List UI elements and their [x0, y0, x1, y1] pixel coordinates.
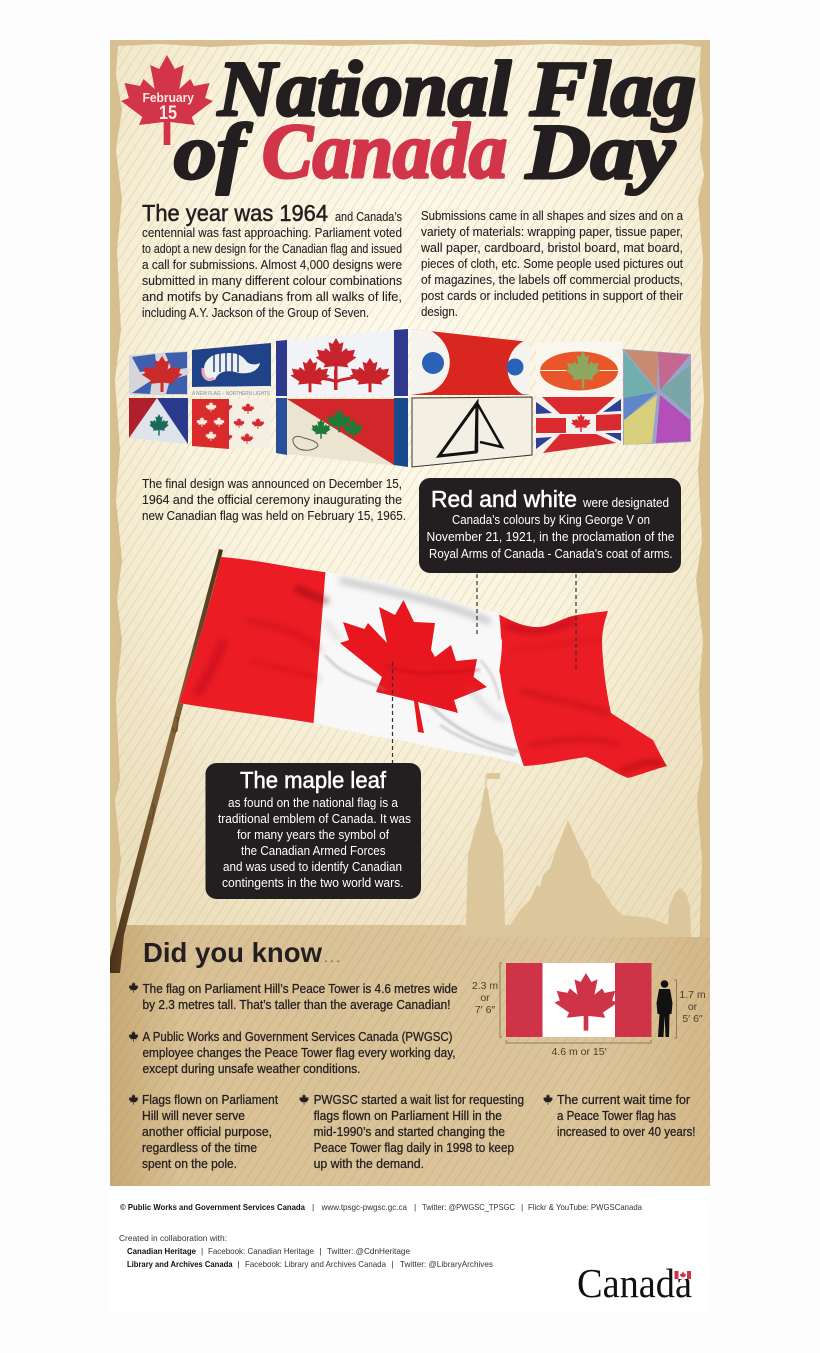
footer credits: Flickr & YouTube: PWGSCanada — [528, 1202, 642, 1212]
footer credits: Library and Archives Canada — [127, 1259, 233, 1269]
title: National — [217, 45, 511, 132]
flag design: diagonal with beaver — [276, 398, 408, 467]
fact: wait list: Peace Tower flag daily in 1998 to keep — [314, 1141, 514, 1155]
chart: flag size diagram: 7′ 6″ — [475, 1004, 495, 1016]
fact: flag size: The flag on Parliament Hill’s Peace Tower is 4.6 metres wide — [142, 982, 458, 996]
chart: flag size diagram: or — [480, 992, 490, 1004]
fact: PWGSC employee: A Public Works and Government Services Canada (PWGSC) — [142, 1030, 452, 1044]
fact: flags never reused: spent on the pole. — [142, 1157, 237, 1171]
logo: Canada wordmark: Canada — [577, 1260, 692, 1306]
panel: submitted flag designs — [129, 329, 691, 467]
flag design: nine leaves — [192, 399, 271, 449]
callout: red and white: Canada's colours by King George V on — [452, 513, 650, 527]
footer credits: © Public Works and Government Services Canada — [120, 1202, 305, 1212]
fact: flags never reused: Hill will never serve — [142, 1109, 245, 1123]
icon: date maple leaf — [121, 55, 213, 145]
flag design: crayon — [623, 349, 691, 445]
flag design: union style — [536, 397, 621, 453]
footer credits: www.tpsgc-pwgsc.gc.ca — [321, 1202, 407, 1212]
fact: flag size: by 2.3 metres tall. That’s taller than the average Canadian! — [142, 998, 450, 1012]
text block: final design: The final design was announced on December 15, — [142, 477, 402, 491]
callout: the maple leaf: for many years the symbol of — [237, 828, 389, 842]
footer credits: | — [521, 1202, 523, 1212]
text block: the year was 1964: to adopt a new design for the Canadian flag and issued — [142, 242, 402, 256]
footer credits: | — [392, 1259, 394, 1269]
text block: final design: 1964 and the official ceremony inaugurating the — [142, 493, 402, 507]
icon: date maple leaf: 15 — [159, 103, 177, 124]
footer credits: Twitter: @LibraryArchives — [400, 1259, 493, 1269]
fact: flags never reused: Flags flown on Parliament — [142, 1093, 278, 1107]
text block: the year was 1964: a call for submissions. Almost 4,000 designs were — [142, 258, 402, 272]
text block: the year was 1964: centennial was fast approaching. Parliament voted — [142, 226, 402, 240]
chart: flag size diagram: 2.3 m — [472, 980, 498, 992]
heading: did you know: ... — [324, 949, 340, 965]
flag design: orange oval green leaf — [536, 341, 622, 397]
text block: submissions: pieces of cloth, etc. Some people used pictures out — [421, 257, 683, 271]
flag pole — [110, 549, 223, 973]
footer credits: Created in collaboration with: — [119, 1233, 227, 1243]
title: Day — [525, 108, 675, 195]
text block: the year was 1964: The year was 1964 — [142, 200, 328, 226]
flag design: red with blue dots — [411, 329, 530, 395]
large waving Canadian flag — [179, 557, 667, 778]
title: of — [174, 108, 253, 195]
callout: red and white: Red and white — [431, 486, 577, 512]
chart: flag size diagram: 1.7 m — [679, 989, 706, 1001]
title — [174, 45, 696, 195]
text block: submissions: variety of materials: wrapping paper, tissue paper, — [421, 225, 683, 239]
panel: poster background — [110, 40, 710, 1186]
flag design: triangle with green leaf — [129, 398, 188, 444]
text block: submissions: design. — [421, 305, 458, 319]
panel: did you know background — [110, 925, 710, 1186]
chart: flag size diagram: or — [688, 1001, 698, 1013]
size brackets — [500, 963, 676, 1043]
footer credits: Twitter: @PWGSC_TPSGC — [422, 1202, 515, 1212]
footer credits: | — [312, 1202, 314, 1212]
text block: submissions: post cards or included petitions in support of their — [421, 289, 683, 303]
callout: the maple leaf: and was used to identify Canadian — [223, 860, 402, 874]
dashed leader lines — [392, 574, 576, 763]
text block: submissions: of magazines, the labels off commercial products, — [421, 273, 683, 287]
text block: the year was 1964: including A.Y. Jackson of the Group of Seven. — [142, 306, 369, 320]
fact: wait time: increased to over 40 years! — [557, 1125, 696, 1139]
chart: flag size diagram: 5′ 6″ — [682, 1013, 703, 1025]
footer credits: | — [238, 1259, 240, 1269]
callout: the maple leaf: traditional emblem of Canada. It was — [218, 812, 411, 826]
fact: wait time — [543, 1093, 696, 1139]
text block: final design — [142, 477, 406, 523]
fact: flags never reused: regardless of the time — [142, 1141, 257, 1155]
fact: PWGSC employee — [129, 1030, 455, 1076]
footer credits: Twitter: @CdnHeritage — [327, 1246, 410, 1256]
footer credits — [119, 1202, 642, 1269]
callout: red and white: November 21, 1921, in the proclamation of the — [426, 530, 675, 544]
callout: red and white: Royal Arms of Canada - Canada's coat of arms. — [429, 547, 673, 561]
callout: red and white — [419, 478, 681, 573]
text block: submissions: wall paper, cardboard, bristol board, mat board, — [420, 241, 683, 255]
footer credits: Facebook: Canadian Heritage — [208, 1246, 314, 1256]
silhouette: Parliament Hill — [460, 773, 691, 940]
footer credits: | — [320, 1246, 322, 1256]
callout: the maple leaf: the Canadian Armed Forces — [241, 844, 386, 858]
fact: wait list: mid-1990’s and started changing the — [314, 1125, 505, 1139]
callout: the maple leaf — [206, 763, 421, 899]
icon: person silhouette — [656, 980, 672, 1037]
fact: flags never reused: another official purpose, — [142, 1125, 272, 1139]
callout: red and white: were designated — [582, 496, 669, 510]
flag design: three red leaves — [276, 329, 408, 396]
chart: flag size diagram: 4.6 m or 15′ — [551, 1046, 607, 1058]
title: Flag — [529, 45, 696, 132]
callout: the maple leaf: as found on the national flag is a — [228, 796, 398, 810]
callout: the maple leaf: contingents in the two world wars. — [222, 876, 404, 890]
chart: flag size diagram — [472, 963, 706, 1058]
maple leaf emblem — [340, 600, 487, 733]
footer credits: | — [201, 1246, 203, 1256]
text block: final design: new Canadian flag was held on February 15, 1965. — [142, 509, 406, 523]
flag design: northern lights: A NEW FLAG – NORTHERN LIGHTS — [192, 391, 271, 397]
text block: submissions: Submissions came in all shapes and sizes and on a — [421, 209, 683, 223]
icon: date maple leaf: February — [142, 90, 195, 105]
fact: flags never reused — [129, 1093, 278, 1171]
flag design: northern lights — [192, 343, 271, 397]
fact: PWGSC employee: employee changes the Peace Tower flag every working day, — [142, 1046, 456, 1060]
heading: did you know: Did you know — [143, 937, 322, 968]
title: Canada — [262, 107, 507, 194]
fact: wait list: up with the demand. — [314, 1157, 424, 1171]
text block: submissions — [420, 209, 683, 319]
fact: wait time: The current wait time for — [557, 1093, 690, 1107]
fact: wait time: a Peace Tower flag has — [557, 1109, 676, 1123]
flag illustration — [506, 963, 652, 1037]
text block: the year was 1964 — [142, 200, 402, 320]
fact: flag size — [129, 982, 458, 1012]
callout: the maple leaf: The maple leaf — [240, 767, 387, 793]
footer credits: Facebook: Library and Archives Canada — [245, 1259, 386, 1269]
flag design: black triangles — [412, 397, 532, 467]
panel: footer — [110, 1186, 710, 1313]
text block: the year was 1964: submitted in many different colour combinations — [142, 274, 402, 288]
text block: the year was 1964: and motifs by Canadians from all walks of life, — [142, 290, 402, 304]
fact: PWGSC employee: except during unsafe weather conditions. — [142, 1062, 360, 1076]
footer credits: Canadian Heritage — [127, 1246, 196, 1256]
fact: wait list: flags flown on Parliament Hill in the — [314, 1109, 502, 1123]
fact: wait list: PWGSC started a wait list for requesting — [314, 1093, 524, 1107]
flag design: blue star maple — [129, 351, 188, 395]
text block: the year was 1964: and Canada’s — [335, 210, 402, 224]
footer credits: | — [414, 1202, 416, 1212]
fact: wait list — [299, 1093, 524, 1171]
